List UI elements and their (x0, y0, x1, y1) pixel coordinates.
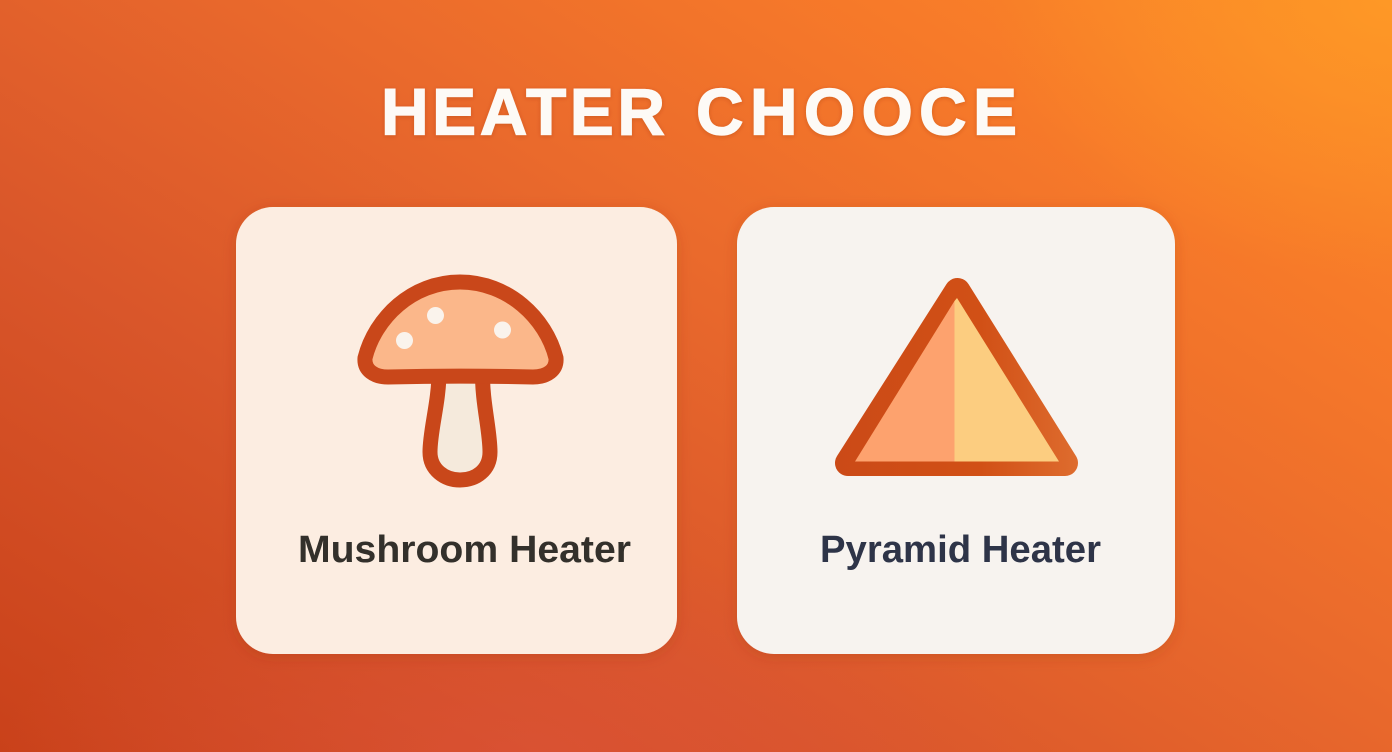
card background: mushroom (236, 207, 677, 654)
pyramid right face (954, 298, 1059, 462)
card background: pyramid (737, 207, 1175, 654)
pyramid outline (848, 291, 1065, 463)
title: HEATER (381, 74, 665, 148)
pyramid left face (855, 301, 954, 462)
mushroom spots (396, 307, 511, 349)
panel: pyramid heater (737, 207, 1175, 654)
label: pyramid heater: Pyramid Heater (820, 529, 1101, 571)
title: CHOOCE (696, 74, 1017, 148)
panel: mushroom heater (236, 207, 677, 654)
icon: pyramid (848, 291, 1065, 463)
icon: mushroom (365, 282, 556, 480)
mushroom stem (430, 372, 490, 480)
label: mushroom heater: Mushroom Heater (298, 529, 631, 571)
mushroom cap (365, 282, 556, 377)
title (381, 74, 1017, 148)
